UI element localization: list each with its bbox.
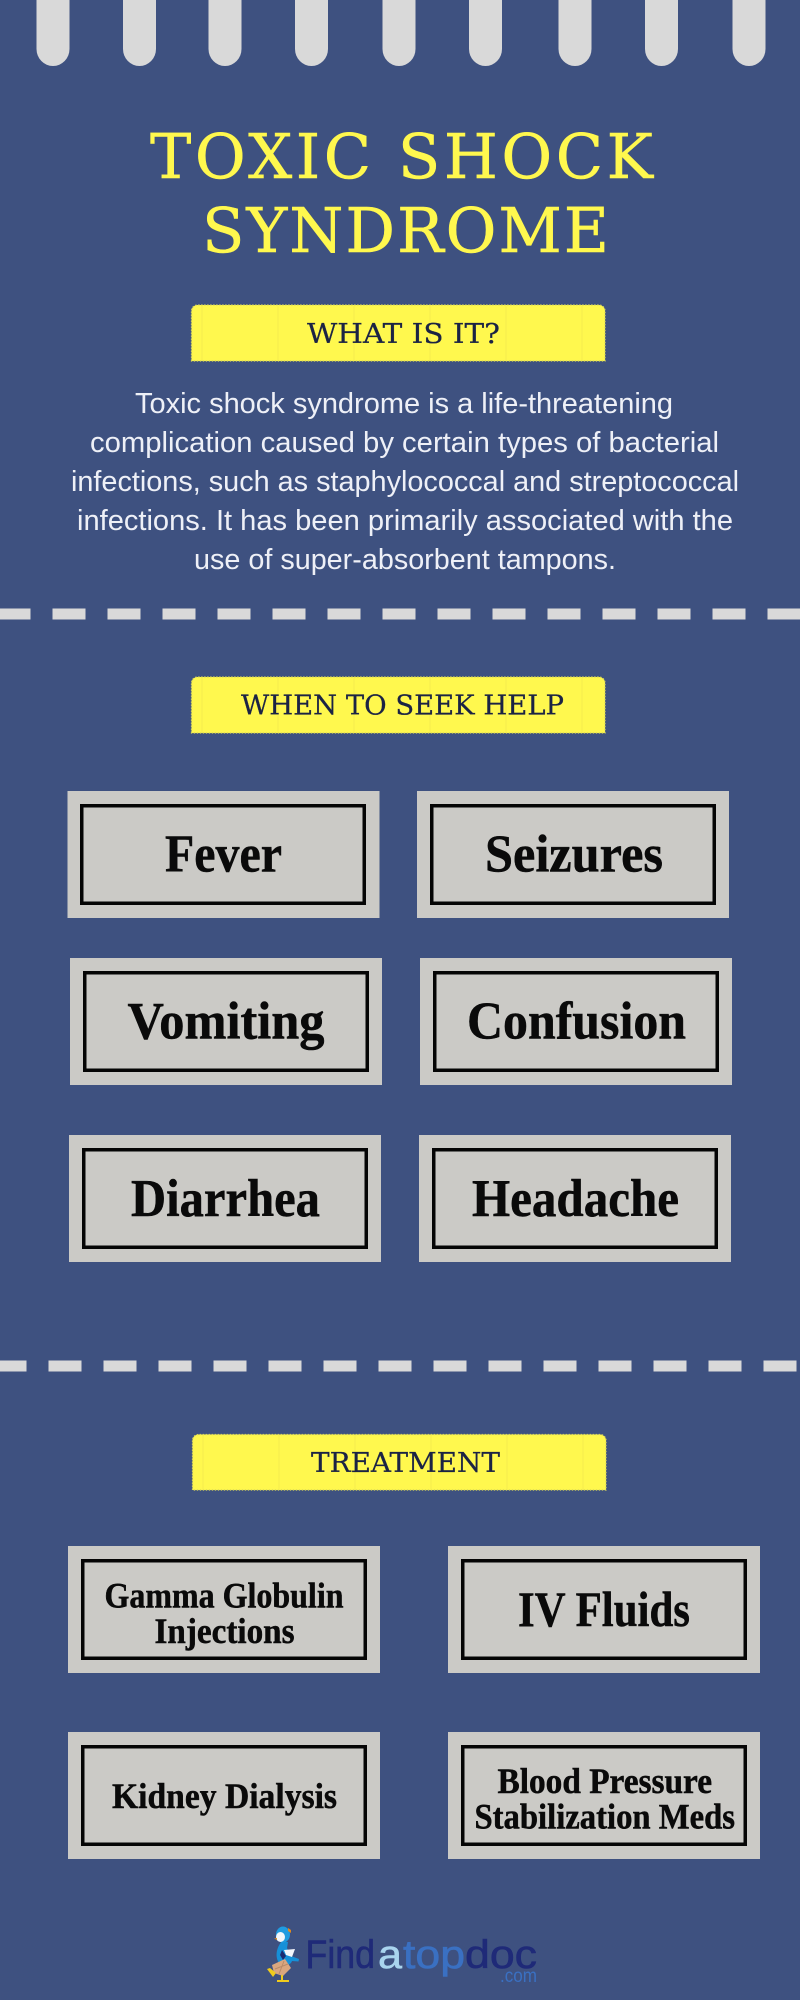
logo wordmark: Find <box>306 1933 375 1977</box>
treatment card: Gamma Globulin Injections <box>68 1546 380 1673</box>
treatment card: Gamma Globulin Injections: Gamma Globulin <box>104 1576 344 1616</box>
description text: infections, such as staphylococcal and streptococcal <box>71 466 739 498</box>
treatment card: Kidney Dialysis: Kidney Dialysis <box>112 1776 337 1816</box>
section banner: treatment <box>192 1434 606 1490</box>
logo wordmark: doc <box>465 1933 537 1977</box>
binder tabs along the top edge <box>36 0 766 66</box>
symptom card: Headache <box>419 1135 731 1262</box>
symptom card: Seizures <box>417 791 729 918</box>
symptom card: Diarrhea: Diarrhea <box>131 1170 320 1228</box>
treatment card: Gamma Globulin Injections: Injections <box>154 1611 294 1651</box>
description text: Toxic shock syndrome is a life-threatening <box>135 388 673 420</box>
section banner: what is it: WHAT IS IT? <box>307 318 500 350</box>
logo: Findatopdoc <box>267 1926 537 1987</box>
treatment card: Blood Pressure Stabilization Meds: Stabilization Meds <box>474 1796 735 1836</box>
symptom card: Vomiting <box>70 958 382 1085</box>
treatment card: Blood Pressure Stabilization Meds <box>448 1732 760 1859</box>
title: TOXIC SHOCK <box>150 120 655 193</box>
symptom card: Fever <box>68 791 380 918</box>
description text: infections. It has been primarily associated with the <box>77 505 733 537</box>
title <box>150 120 655 267</box>
description text <box>71 388 739 576</box>
section banner: treatment: TREATMENT <box>311 1447 501 1479</box>
logo wordmark <box>306 1933 537 1977</box>
symptom card: Confusion: Confusion <box>467 992 686 1050</box>
symptom card: Fever: Fever <box>165 826 282 884</box>
logo domain suffix: .com <box>500 1966 537 1987</box>
treatment card: IV Fluids: IV Fluids <box>518 1581 690 1637</box>
symptom card: Seizures: Seizures <box>485 826 663 884</box>
symptom card: Vomiting: Vomiting <box>128 992 324 1050</box>
description text: use of super-absorbent tampons. <box>194 544 616 576</box>
section banner: what is it <box>192 305 605 361</box>
title: SYNDROME <box>202 194 609 267</box>
description text: complication caused by certain types of bacterial <box>90 427 719 459</box>
symptom card: Diarrhea <box>69 1135 381 1262</box>
section banner: when to seek help <box>192 677 605 733</box>
treatment card: Blood Pressure Stabilization Meds: Blood Pressure <box>498 1761 712 1801</box>
section banner: when to seek help: WHEN TO SEEK HELP <box>241 690 564 722</box>
symptom card: Confusion <box>420 958 732 1085</box>
logo wordmark: top <box>403 1933 465 1977</box>
icon: bird mascot <box>267 1926 299 1982</box>
dashed divider 1 <box>0 608 800 620</box>
dashed divider 2 <box>0 1360 796 1372</box>
logo wordmark: a <box>378 1933 403 1977</box>
treatment card: IV Fluids <box>448 1546 760 1673</box>
symptom card: Headache: Headache <box>472 1170 679 1228</box>
treatment card: Kidney Dialysis <box>68 1732 380 1859</box>
